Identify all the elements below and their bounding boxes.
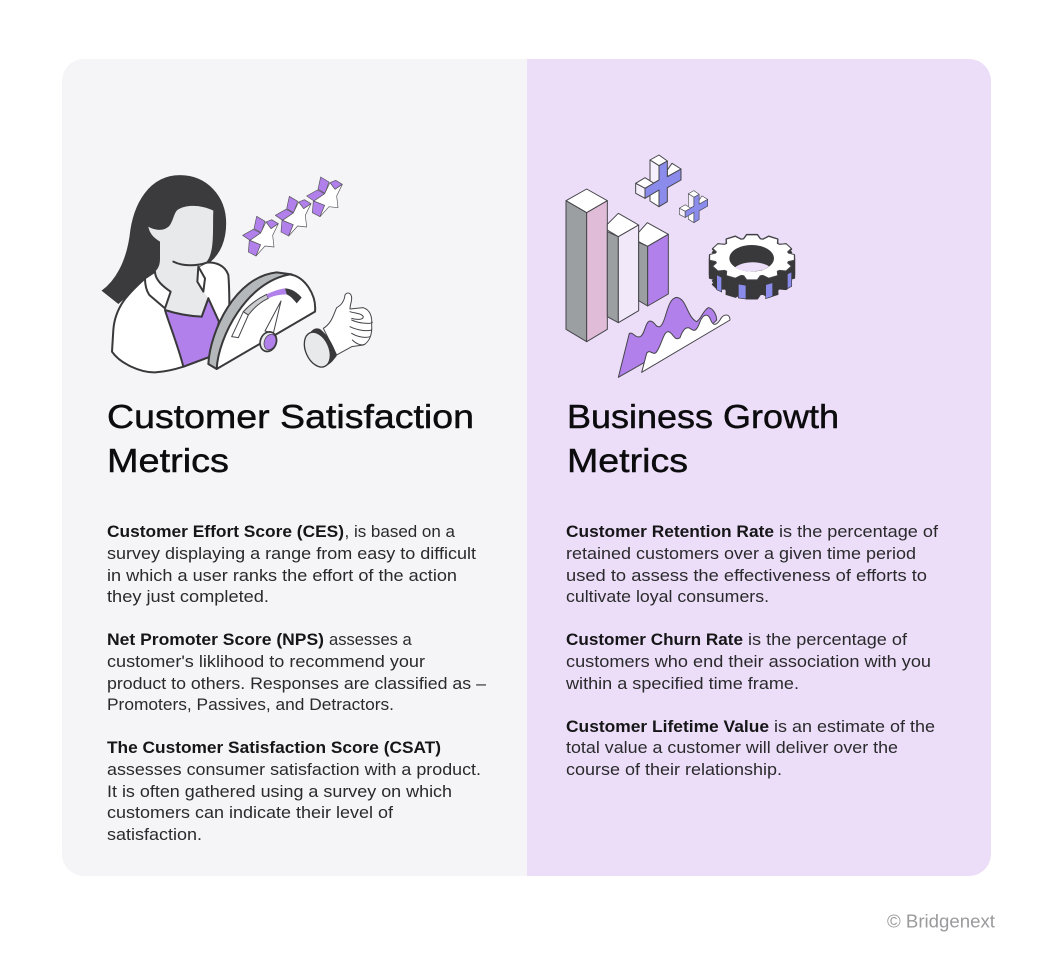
text block: customer satisfaction score: customers can indicate their level of	[107, 803, 393, 822]
footer credit: © Bridgenext	[887, 912, 995, 932]
panel: business growth background	[527, 59, 991, 876]
icon: white wave	[642, 315, 730, 372]
icon: gauge rim	[208, 272, 292, 369]
icon: hair	[102, 176, 226, 303]
icon: gear	[710, 235, 794, 299]
icon: white coat	[112, 262, 229, 372]
text block: customer satisfaction score: The Customer Satisfaction Score (CSAT)	[107, 738, 441, 757]
icon: thumbs up hand	[299, 293, 372, 371]
icon: small plus	[679, 191, 708, 223]
text block: customer satisfaction score: satisfaction.	[107, 825, 202, 844]
icon: star two	[275, 196, 311, 236]
illustration: business growth charts and gear	[566, 155, 794, 377]
icon: left collar	[145, 272, 171, 308]
text block: customer satisfaction score	[107, 738, 481, 844]
text block: customer effort score: they just completed.	[107, 587, 269, 606]
heading: business growth metrics: Metrics	[567, 442, 688, 479]
heading: business growth metrics: Business Growth	[567, 398, 839, 435]
text block: customer effort score: Customer Effort Score (CES)	[107, 522, 344, 541]
text block: customer lifetime value	[566, 717, 935, 779]
text block: customer churn rate: customers who end their association with you	[566, 652, 931, 671]
icon: gauge scale	[232, 288, 302, 338]
text block: customer effort score: , is based on a	[344, 522, 456, 541]
text block: net promoter score: Net Promoter Score (NPS)	[107, 630, 324, 649]
text block: customer retention rate	[566, 522, 938, 606]
text block: customer satisfaction score: It is often gathered using a survey on which	[107, 782, 452, 801]
text block: customer churn rate: is the percentage of	[748, 630, 907, 649]
text block: net promoter score: product to others. Responses are classified as –	[107, 674, 487, 693]
text block: customer retention rate: Customer Retention Rate	[566, 522, 774, 541]
text block: customer retention rate: is the percentage of	[779, 522, 938, 541]
text block: customer lifetime value: is an estimate of the	[774, 717, 935, 736]
text block: customer churn rate	[565, 630, 931, 693]
heading: customer satisfaction metrics: Metrics	[107, 442, 229, 479]
text block: customer effort score	[107, 522, 476, 606]
text block: customer effort score: in which a user ranks the effort of the action	[107, 566, 457, 585]
icon: gauge face	[217, 274, 315, 369]
heading: customer satisfaction metrics	[107, 398, 474, 479]
text block: customer lifetime value: total value a customer will deliver over the	[566, 738, 898, 757]
icon: star one	[243, 216, 278, 256]
icon: neckline and chin	[165, 262, 208, 317]
text block: customer effort score: survey displaying a range from easy to difficult	[107, 544, 476, 563]
icon: middle bar	[607, 213, 639, 323]
text block: customer lifetime value: course of their relationship.	[566, 760, 782, 779]
icon: large plus	[636, 155, 681, 207]
text block: net promoter score	[107, 630, 487, 714]
text block: customer retention rate: used to assess the effectiveness of efforts to	[566, 566, 927, 585]
icon: tall bar	[566, 189, 607, 342]
text block: net promoter score: customer's liklihood to recommend your	[107, 652, 425, 671]
panel: customer satisfaction background	[62, 59, 527, 876]
heading: customer satisfaction metrics: Customer Satisfaction	[107, 398, 474, 435]
text block: customer retention rate: retained customers over a given time period	[566, 544, 916, 563]
icon: neck and face	[148, 206, 213, 317]
heading: business growth metrics	[567, 398, 839, 479]
icon: gauge knob	[257, 330, 279, 354]
text block: customer churn rate: within a specified time frame.	[565, 674, 799, 693]
icon: short bar	[639, 223, 668, 306]
icon: purple wave	[618, 297, 717, 377]
icon: right collar	[197, 267, 205, 292]
text block: customer retention rate: cultivate loyal consumers.	[566, 587, 769, 606]
icon: star three	[307, 177, 342, 217]
text block: net promoter score: Promoters, Passives, and Detractors.	[107, 695, 394, 714]
text block: net promoter score: assesses a	[329, 630, 412, 649]
icon: gauge needle	[265, 301, 281, 333]
illustration: woman with satisfaction gauge	[102, 176, 372, 372]
text block: customer churn rate: Customer Churn Rate	[566, 630, 743, 649]
text block: customer lifetime value: Customer Lifetime Value	[566, 717, 769, 736]
text block: customer satisfaction score: assesses consumer satisfaction with a product.	[107, 760, 481, 779]
icon: purple top	[165, 298, 219, 367]
